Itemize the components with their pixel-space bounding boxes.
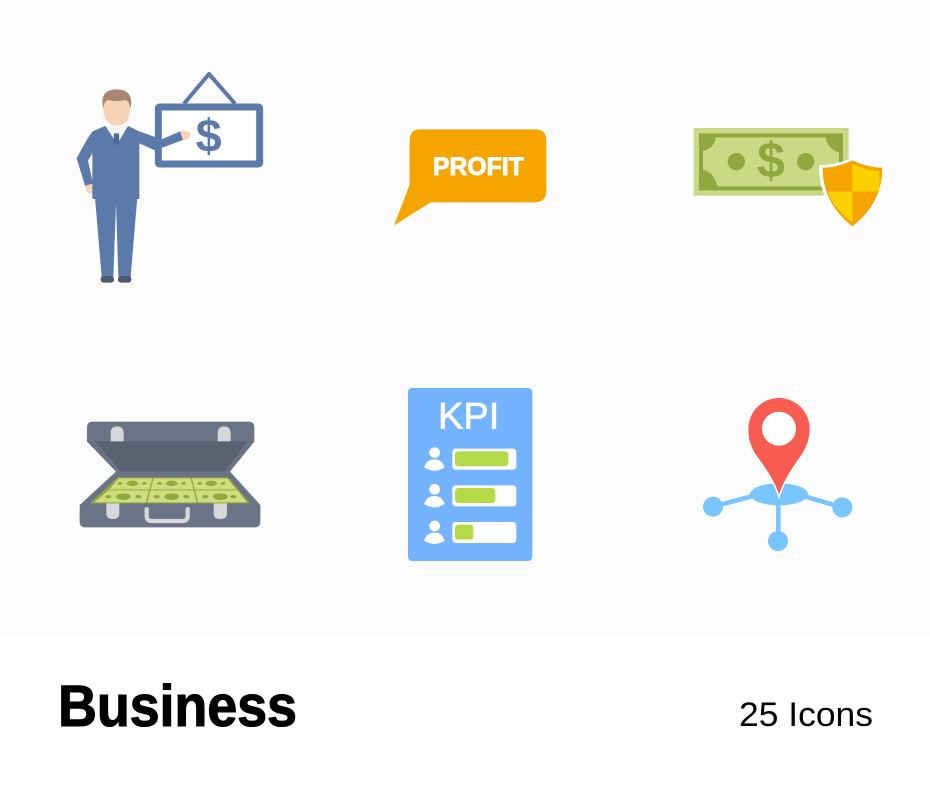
KPI row 2 bbox=[424, 484, 516, 507]
icon: open briefcase full of cash bbox=[80, 422, 260, 527]
KPI row 1 bbox=[424, 447, 516, 471]
icon: KPI report card bbox=[408, 388, 532, 561]
icon: businessman presenting dollar sign bbox=[77, 74, 260, 283]
icon: profit speech bubble bbox=[394, 129, 546, 225]
KPI row 3 bbox=[424, 521, 516, 544]
icon: banknote with shield: $ bbox=[757, 133, 785, 189]
icon count: 25 Icons bbox=[739, 696, 873, 734]
title: Business bbox=[58, 673, 297, 738]
icon: businessman presenting dollar sign: $ bbox=[196, 110, 222, 162]
icon: banknote with shield bbox=[694, 128, 885, 229]
KPI heading: KPI bbox=[438, 395, 499, 436]
icon: location pin with network bbox=[703, 398, 852, 551]
icon: profit speech bubble: PROFIT bbox=[433, 154, 524, 181]
